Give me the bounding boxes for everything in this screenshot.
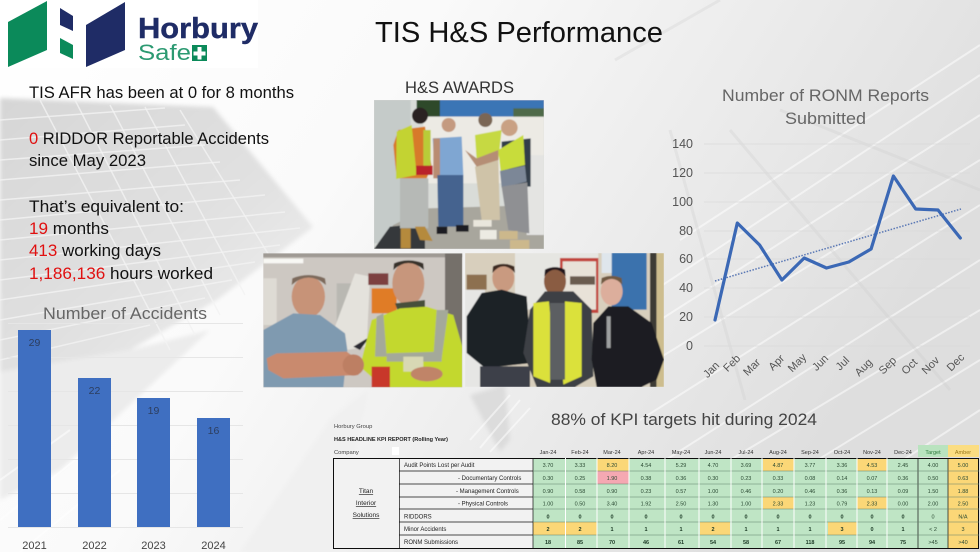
table values: 0.14 [837, 476, 847, 482]
table values: 3.40 [607, 502, 617, 508]
table values: 70 [609, 540, 615, 546]
table values: 2 [578, 527, 582, 533]
table values: 0.30 [543, 476, 553, 482]
chart heading: Number of Accidents [43, 305, 207, 323]
bar axis labels [22, 540, 226, 552]
table values: 3 [840, 527, 844, 533]
table values: 0 [840, 514, 844, 520]
table values: 0.36 [676, 476, 686, 482]
photo: four men on site [370, 95, 547, 252]
icon: Horbury mark [8, 1, 125, 67]
column headers: Sep-24 [801, 450, 819, 456]
bar: 2022 [78, 378, 111, 527]
table values: 3.69 [741, 463, 751, 469]
text block: RIDDOR statistics: since May 2023 [29, 152, 146, 170]
table values: 0.25 [575, 476, 585, 482]
bar: 2022: 22 [89, 385, 100, 397]
table values: 0.58 [575, 489, 585, 495]
x axis labels: Aug [853, 357, 875, 379]
table values: 0.90 [607, 489, 617, 495]
table values: 61 [678, 540, 684, 546]
text block: RIDDOR statistics: TIS AFR has been at 0 for 8 months [29, 84, 294, 102]
bar: 2024: 16 [208, 425, 219, 437]
table values: 0.23 [641, 489, 651, 495]
table values: 0.13 [867, 489, 877, 495]
table values: 0 [610, 514, 614, 520]
table values: 3 [961, 527, 965, 533]
row labels: Minor Accidents [404, 527, 446, 533]
x axis labels: Jul [834, 355, 852, 373]
table values: 1.30 [708, 502, 718, 508]
x axis labels: Dec [945, 351, 967, 374]
column headers: Aug-24 [769, 450, 787, 456]
table values: 0.09 [898, 489, 908, 495]
x axis labels: Oct [900, 357, 920, 377]
table grid [334, 458, 979, 548]
bar axis labels: 2022 [82, 540, 107, 552]
column headers: Jun-24 [705, 450, 721, 456]
table values: 1.00 [741, 502, 751, 508]
table values: 4.53 [867, 463, 877, 469]
company label [353, 488, 380, 519]
table values: 0.46 [741, 489, 751, 495]
table values: 0.23 [741, 476, 751, 482]
table title: H&S HEADLINE KPI REPORT (Rolling Year) [334, 437, 448, 443]
table values: 2.50 [958, 502, 968, 508]
table values: 1.88 [958, 489, 968, 495]
table values: 95 [839, 540, 845, 546]
bar: 2024 [197, 418, 230, 527]
chart heading: Number of RONM Reports [722, 87, 929, 105]
table values: 1 [610, 527, 614, 533]
table values: 0 [776, 514, 780, 520]
text block: RIDDOR statistics: 19 months [29, 220, 109, 238]
x axis labels [701, 351, 967, 381]
table values: 0.50 [575, 502, 585, 508]
table values: 2.45 [898, 463, 908, 469]
table values: 4.70 [708, 463, 718, 469]
x axis labels: Apr [767, 352, 787, 373]
table values: 2.00 [928, 502, 938, 508]
table values: 0.50 [928, 476, 938, 482]
column headers [540, 450, 912, 456]
table values: 8.20 [607, 463, 617, 469]
table values: 1.50 [928, 489, 938, 495]
table values: 54 [710, 540, 717, 546]
chart heading: Submitted [785, 110, 866, 128]
row labels: Audit Points Lost per Audit [404, 463, 475, 469]
y axis labels: 140 [672, 137, 693, 151]
data line [715, 176, 960, 320]
table values: 0.08 [805, 476, 815, 482]
table values: 0.36 [837, 489, 847, 495]
y axis labels: 20 [679, 310, 693, 324]
table values: 0 [870, 527, 874, 533]
text block: RIDDOR statistics: 1,186,136 hours worked [29, 265, 213, 283]
text block: RIDDOR statistics: That’s equivalent to: [29, 198, 184, 216]
table values: 46 [643, 540, 649, 546]
table values: 0 [679, 514, 683, 520]
bar axis labels: 2024 [201, 540, 226, 552]
bar: 2023 [137, 398, 170, 527]
row labels [404, 463, 521, 546]
column headers: Mar-24 [603, 450, 621, 456]
title: TIS H&S Performance [375, 17, 663, 49]
table values: 5.29 [676, 463, 686, 469]
y axis labels: 120 [672, 166, 693, 180]
y axis labels [672, 137, 693, 353]
table values: 0 [901, 514, 905, 520]
column headers: Oct-24 [834, 450, 850, 456]
company label: Titan [359, 488, 373, 495]
table values: 0.38 [641, 476, 651, 482]
KPI table: Amber [955, 450, 971, 456]
table values: >45 [928, 540, 938, 546]
text block: RIDDOR statistics: 413 working days [29, 242, 161, 260]
heading: H&S awards: H&S AWARDS [405, 79, 514, 97]
row labels: RIDDORS [404, 514, 432, 520]
table values: 4.87 [773, 463, 783, 469]
company label: Solutions [353, 512, 380, 519]
column headers: Feb-24 [571, 450, 589, 456]
bar: 2023: 19 [148, 405, 159, 417]
column headers: May-24 [672, 450, 690, 456]
column headers: Jul-24 [739, 450, 753, 456]
table values: 1.00 [708, 489, 718, 495]
bar: 2021 [18, 330, 51, 527]
bar axis labels: 2021 [22, 540, 47, 552]
line chart: number of RONM reports submitted [672, 87, 970, 381]
table values [543, 463, 968, 546]
table values: 0 [808, 514, 812, 520]
text block: RIDDOR statistics [29, 84, 294, 283]
label column background [333, 458, 533, 548]
table values: 0.07 [867, 476, 877, 482]
table values: 2.33 [867, 502, 877, 508]
logo [0, 0, 258, 68]
table values: 3.70 [543, 463, 553, 469]
table values: 0.63 [958, 476, 968, 482]
table values: 58 [743, 540, 749, 546]
table values: 0 [711, 514, 715, 520]
table values: 0 [744, 514, 748, 520]
table values: < 2 [929, 527, 937, 533]
column headers: Dec-24 [894, 450, 912, 456]
photo: handshake with award [260, 250, 467, 390]
table values: 0.33 [773, 476, 783, 482]
table values: 2 [546, 527, 550, 533]
table title: Horbury Group [334, 424, 372, 430]
column headers: Apr-24 [638, 450, 654, 456]
table values: 0.30 [708, 476, 718, 482]
table values: 0.57 [676, 489, 686, 495]
table values: 3.77 [805, 463, 815, 469]
company label: Interior [356, 500, 377, 507]
y axis labels: 100 [672, 195, 693, 209]
table values: 0 [931, 514, 935, 520]
column headers: Nov-24 [863, 450, 881, 456]
table values: 1 [776, 527, 780, 533]
table title [334, 424, 448, 456]
table values: 18 [545, 540, 551, 546]
table values: 1 [644, 527, 648, 533]
table values: 0.46 [805, 489, 815, 495]
bar axis labels: 2023 [141, 540, 166, 552]
table values: 5.00 [958, 463, 968, 469]
KPI table [333, 424, 979, 548]
x axis labels: May [786, 351, 809, 375]
table values: 0 [870, 514, 874, 520]
x axis labels: Nov [920, 354, 942, 377]
table values: 94 [869, 540, 876, 546]
table values: 118 [806, 540, 814, 546]
table values: 0.79 [837, 502, 847, 508]
table values: 2.50 [676, 502, 686, 508]
table values: 2.33 [773, 502, 783, 508]
row labels: - Physical Controls [458, 502, 508, 508]
y axis labels: 80 [679, 224, 693, 238]
table values: 4.54 [641, 463, 651, 469]
table values: 0.36 [898, 476, 908, 482]
row labels: - Documentary Controls [458, 476, 521, 482]
y axis labels: 0 [686, 339, 693, 353]
y axis labels: 40 [679, 281, 693, 295]
x axis labels: Jan [701, 360, 722, 381]
table values: 3.36 [837, 463, 847, 469]
table values: >40 [958, 540, 968, 546]
table values: 75 [900, 540, 906, 546]
KPI table: Target [925, 450, 941, 456]
x axis labels: Mar [741, 356, 763, 379]
icon: safety cross [192, 45, 207, 61]
table values: 1 [808, 527, 812, 533]
bar: 2021: 29 [29, 337, 40, 349]
table values: 1.23 [805, 502, 815, 508]
table values: 0 [644, 514, 648, 520]
table values: N/A [958, 514, 968, 520]
table title: Company [334, 450, 359, 456]
table values: 1 [679, 527, 683, 533]
table values: 1 [901, 527, 905, 533]
column headers: Jan-24 [540, 450, 556, 456]
table values: 2 [711, 527, 715, 533]
heading: KPI targets: 88% of KPI targets hit during 2024 [551, 411, 817, 429]
table values: 0 [546, 514, 550, 520]
table values: 1 [744, 527, 748, 533]
text block: RIDDOR statistics: 0 RIDDOR Reportable Accidents [29, 130, 269, 148]
chart heading [722, 87, 929, 128]
row labels: RONM Submissions [404, 540, 458, 546]
table values: 0.90 [543, 489, 553, 495]
y axis labels: 60 [679, 252, 693, 266]
table values: 3.33 [575, 463, 585, 469]
table values: 67 [775, 540, 781, 546]
amber and red cells [533, 458, 979, 548]
table values: 85 [577, 540, 583, 546]
table values: 0.00 [898, 502, 908, 508]
table values: 1.92 [641, 502, 651, 508]
bar chart: number of accidents [8, 305, 243, 552]
photo: three men with award [465, 253, 664, 387]
green cell background [533, 458, 979, 548]
table values: 1.00 [543, 502, 553, 508]
table values: 4.00 [928, 463, 938, 469]
x axis labels: Feb [721, 353, 743, 375]
trendline [715, 209, 961, 281]
row labels: - Management Controls [456, 489, 519, 495]
table values: 1.90 [607, 476, 617, 482]
logo subtitle: Safe [138, 40, 191, 65]
x axis labels: Sep [877, 355, 899, 377]
x axis labels: Jun [810, 353, 831, 374]
table values: 0 [578, 514, 582, 520]
table values: 0.20 [773, 489, 783, 495]
logo wordmark: Horbury [138, 13, 258, 45]
